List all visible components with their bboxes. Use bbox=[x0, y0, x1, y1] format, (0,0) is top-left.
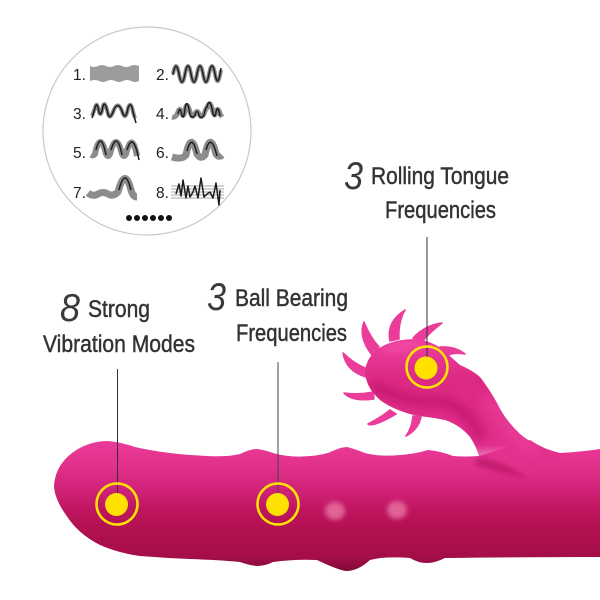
label: rolling tongue frequencies bbox=[344, 155, 509, 224]
label: strong vibration modes bbox=[43, 287, 195, 358]
neck shadow bbox=[474, 458, 526, 477]
product illustration bbox=[54, 310, 600, 571]
main shaft bbox=[54, 440, 600, 571]
mode 5 bbox=[73, 141, 139, 162]
marker: tongue bbox=[406, 346, 448, 388]
tongue spikes bbox=[343, 310, 465, 436]
mode 1: 1. bbox=[73, 67, 86, 84]
leader line: vibration bbox=[116, 369, 118, 493]
mode 4: 4. bbox=[156, 106, 169, 123]
mode 7 bbox=[73, 178, 137, 202]
leader line: tongue bbox=[426, 237, 428, 366]
ball dimples bbox=[325, 502, 345, 520]
label: ball bearing frequencies: Frequencies bbox=[236, 320, 347, 347]
mode 8: 8. bbox=[156, 185, 169, 202]
mode 2 bbox=[156, 66, 221, 84]
mode 8 bbox=[156, 178, 224, 205]
label: rolling tongue frequencies: Frequencies bbox=[385, 197, 496, 224]
leader line: ball bearing bbox=[277, 362, 279, 500]
mode 7: 7. bbox=[73, 185, 86, 202]
label: ball bearing frequencies bbox=[207, 276, 348, 347]
mode 5: 5. bbox=[73, 145, 86, 162]
mode 4 bbox=[156, 102, 222, 123]
mode 6 bbox=[156, 142, 222, 162]
mode 2: 2. bbox=[156, 67, 169, 84]
label: rolling tongue frequencies: 3 bbox=[344, 155, 363, 198]
label: ball bearing frequencies: Ball Bearing bbox=[235, 285, 348, 312]
label: rolling tongue frequencies: Rolling Tongue bbox=[371, 163, 509, 190]
label: strong vibration modes: Strong bbox=[88, 296, 150, 323]
mode 3: 3. bbox=[73, 106, 86, 123]
more modes dots bbox=[126, 215, 172, 221]
label: strong vibration modes: 8 bbox=[60, 287, 80, 330]
label: strong vibration modes: Vibration Modes bbox=[43, 331, 195, 358]
label: ball bearing frequencies: 3 bbox=[207, 276, 226, 319]
marker: vibration bbox=[96, 484, 138, 524]
mode 6: 6. bbox=[156, 145, 169, 162]
mode 3 bbox=[73, 104, 136, 123]
mode 1 bbox=[73, 65, 139, 84]
head and neck bbox=[365, 339, 560, 480]
panel: vibration modes circle bbox=[43, 27, 251, 235]
marker: ball bearing bbox=[258, 484, 298, 524]
head shading bbox=[372, 346, 535, 450]
